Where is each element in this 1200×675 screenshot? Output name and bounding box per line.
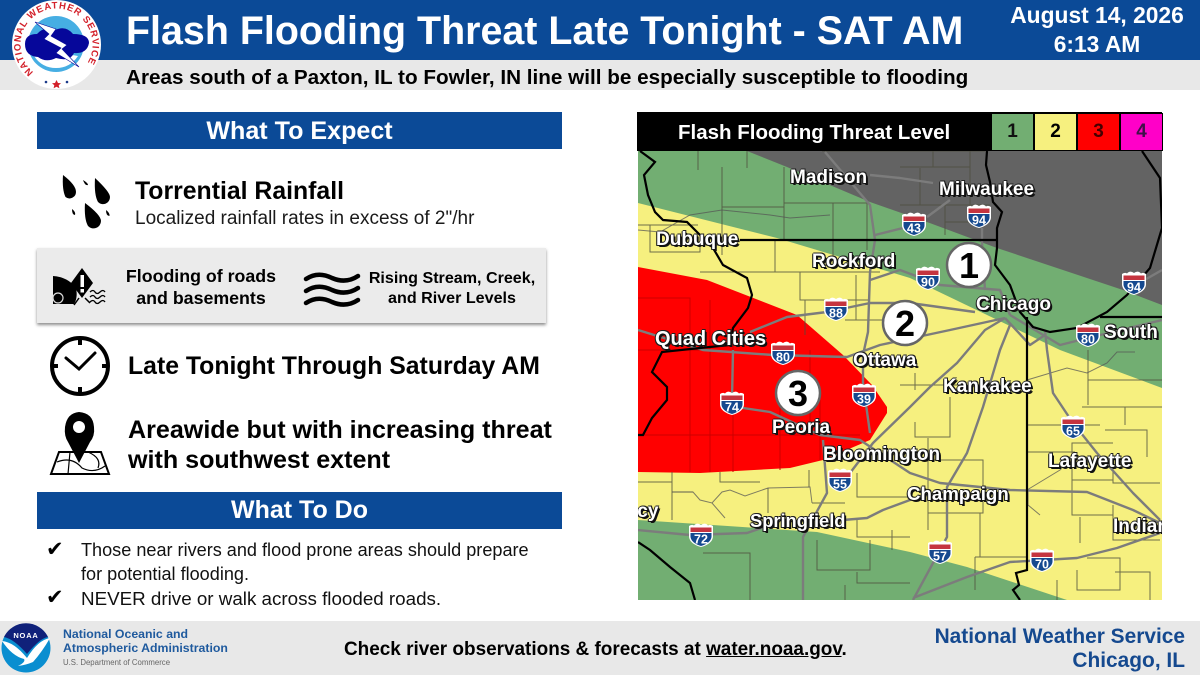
shield: I-72 bbox=[689, 524, 713, 547]
date and time: August 14, 2026 bbox=[1010, 2, 1184, 28]
shield: I-72: 72 bbox=[694, 532, 708, 546]
shield: I-39: 39 bbox=[857, 392, 871, 406]
city: Ottawa: Ottawa bbox=[853, 350, 916, 371]
interstate roads bbox=[637, 152, 1162, 600]
icon: waves bbox=[304, 272, 360, 307]
NOAA name bbox=[63, 627, 228, 655]
city: Peoria: Peoria bbox=[772, 417, 830, 438]
city: Springfield: Springfield bbox=[750, 510, 845, 531]
city: Lafayette: Lafayette bbox=[1048, 451, 1131, 472]
shield: I-94 north: 94 bbox=[972, 214, 986, 228]
shield: I-90 bbox=[916, 267, 940, 290]
shield: I-80 west: 80 bbox=[776, 350, 790, 364]
text: flooding of roads bbox=[126, 266, 276, 308]
subtitle: Areas south of a Paxton, IL to Fowler, IN line will be especially susceptible to flooding bbox=[126, 66, 968, 89]
shield: I-74: 74 bbox=[725, 400, 739, 414]
city: Quad Cities: Quad Cities bbox=[655, 328, 766, 350]
threat marker 1 bbox=[947, 243, 991, 287]
map legend bbox=[637, 112, 1162, 151]
shield: I-65: 65 bbox=[1066, 424, 1080, 438]
date and time bbox=[1010, 2, 1184, 57]
city: Chicago: Chicago bbox=[976, 294, 1051, 315]
shield: I-88: 88 bbox=[829, 306, 843, 320]
text: area: Areawide but with increasing threat bbox=[128, 416, 552, 444]
text: rainfall rates: Localized rainfall rates in excess of 2"/hr bbox=[135, 208, 474, 229]
action text 1: for potential flooding. bbox=[81, 564, 249, 584]
NOAA name: National Oceanic and bbox=[63, 627, 188, 641]
threat map bbox=[638, 151, 1162, 600]
legend level 2: 2 bbox=[1050, 121, 1061, 142]
shield: I-94 east bbox=[1122, 272, 1146, 295]
text: area: with southwest extent bbox=[128, 446, 390, 474]
icon: rain drops bbox=[62, 175, 110, 228]
legend level 2 bbox=[1034, 113, 1077, 151]
shield: I-43: 43 bbox=[907, 222, 921, 236]
NOAA name: Atmospheric Administration bbox=[63, 641, 228, 655]
icon: flooded road bbox=[52, 268, 106, 306]
threat level 3 bbox=[638, 267, 887, 473]
county lines bbox=[638, 151, 1162, 600]
county lines in red bbox=[638, 298, 860, 472]
shield: I-57 bbox=[928, 541, 952, 564]
text: flooding of roads: and basements bbox=[136, 288, 266, 308]
threat level 1 south bbox=[638, 520, 1067, 600]
city: Bloomington: Bloomington bbox=[823, 444, 940, 465]
legend level 4: 4 bbox=[1136, 121, 1147, 142]
city: Champaign: Champaign bbox=[907, 483, 1009, 504]
city: Rockford: Rockford bbox=[812, 251, 895, 272]
shield: I-80 east: 80 bbox=[1081, 332, 1095, 346]
threat marker 3 bbox=[776, 371, 820, 415]
check mark 2: ✔ bbox=[46, 585, 64, 609]
shield: I-43 bbox=[902, 213, 926, 236]
panel: impacts bbox=[37, 248, 546, 323]
shield: I-70 bbox=[1030, 549, 1054, 572]
threat level 1 north bbox=[638, 151, 1162, 388]
action text 1: Those near rivers and flood prone areas should prepare bbox=[81, 540, 529, 560]
below threshold area bbox=[747, 151, 1162, 305]
check mark 1: ✔ bbox=[46, 537, 64, 561]
threat marker 1: 1 bbox=[959, 245, 979, 286]
icon: National Weather Service logo: NATIONAL WEATHER SERVICE bbox=[14, 2, 100, 76]
shield: I-94 east: 94 bbox=[1127, 280, 1141, 294]
footer link text: Check river observations & forecasts at water.noaa.gov. bbox=[344, 639, 847, 660]
shield: I-55 bbox=[828, 469, 852, 492]
title: Flash Flooding Threat Late Tonight - SAT AM bbox=[126, 9, 963, 53]
text: flooding of roads: Flooding of roads bbox=[126, 266, 276, 286]
shield: I-70: 70 bbox=[1035, 558, 1049, 572]
shield: I-90: 90 bbox=[921, 276, 935, 290]
date and time: 6:13 AM bbox=[1054, 31, 1140, 57]
shield: I-80 east bbox=[1076, 324, 1100, 347]
text: timing: Late Tonight Through Saturday AM bbox=[128, 353, 540, 380]
icon: NOAA logo: NOAA bbox=[13, 631, 39, 640]
office name: National Weather Service bbox=[935, 625, 1185, 648]
text: rising water: and River Levels bbox=[388, 289, 516, 307]
subtitle band bbox=[0, 60, 1200, 90]
heading: What To Expect bbox=[37, 112, 562, 149]
text: rising water bbox=[369, 269, 535, 307]
shield: I-94 north bbox=[967, 205, 991, 228]
office name bbox=[935, 625, 1185, 672]
city: Kankakee: Kankakee bbox=[943, 376, 1032, 397]
shield: I-55: 55 bbox=[833, 478, 847, 492]
legend level 1 bbox=[991, 113, 1034, 151]
city: South: South bbox=[1104, 322, 1158, 343]
NOAA department: U.S. Department of Commerce bbox=[63, 658, 170, 667]
legend level 1: 1 bbox=[1007, 121, 1018, 142]
icon: NOAA logo bbox=[2, 623, 50, 672]
threat marker 2: 2 bbox=[895, 303, 915, 344]
heading: What To Do: What To Do bbox=[231, 496, 368, 524]
city labels bbox=[638, 167, 1162, 537]
shield: I-74 bbox=[720, 392, 744, 415]
footer band bbox=[0, 621, 1200, 675]
header band bbox=[0, 0, 1200, 60]
heading: What To Expect: What To Expect bbox=[206, 117, 393, 145]
checklist: what to do bbox=[46, 537, 529, 609]
action text 1 bbox=[81, 540, 529, 584]
threat level 2 background bbox=[638, 151, 1162, 600]
city: Madison: Madison bbox=[790, 167, 867, 188]
city: Dubuque: Dubuque bbox=[656, 229, 738, 250]
threat marker 2 bbox=[883, 301, 927, 345]
city: Milwaukee: Milwaukee bbox=[939, 179, 1034, 200]
shield: I-88 bbox=[824, 298, 848, 321]
legend level 3: 3 bbox=[1093, 121, 1104, 142]
shield: I-80 west bbox=[771, 342, 795, 365]
action text 2: NEVER drive or walk across flooded roads. bbox=[81, 588, 441, 609]
legend level 4 bbox=[1120, 113, 1163, 151]
shield: I-39 bbox=[852, 384, 876, 407]
text: Torrential Rainfall: Torrential Rainfall bbox=[135, 178, 344, 205]
legend level 3 bbox=[1077, 113, 1120, 151]
icon: clock bbox=[50, 336, 110, 396]
threat marker 3: 3 bbox=[788, 373, 808, 414]
shield: I-57: 57 bbox=[933, 550, 947, 564]
text: area bbox=[128, 416, 552, 474]
icon: map pin bbox=[50, 412, 110, 475]
legend title: Flash Flooding Threat Level bbox=[678, 121, 950, 144]
rivers bbox=[638, 210, 1135, 518]
text: rising water: Rising Stream, Creek, bbox=[369, 269, 535, 287]
state and lake boundaries bbox=[638, 151, 1162, 600]
shield: I-65 bbox=[1061, 416, 1085, 439]
heading: What To Do bbox=[37, 492, 562, 529]
office name: Chicago, IL bbox=[1072, 649, 1185, 672]
